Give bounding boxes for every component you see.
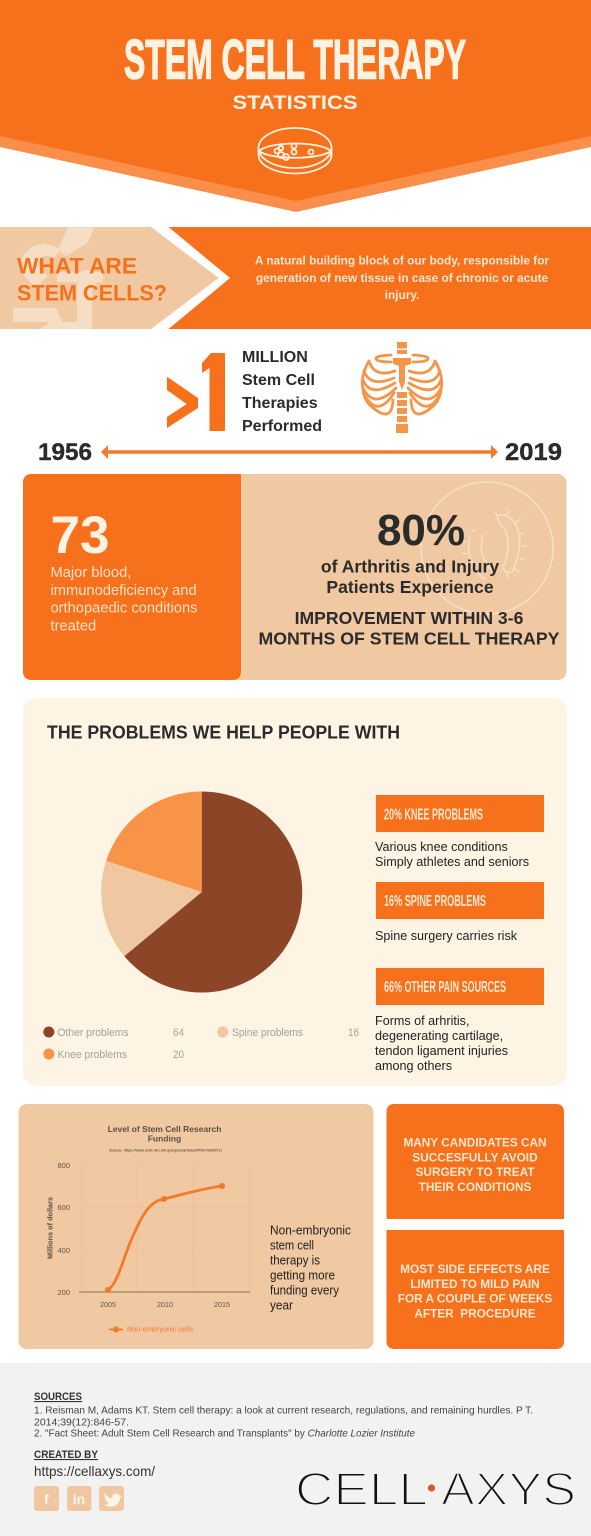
icon: microscope (13, 227, 103, 329)
line chart: 2005 (100, 1300, 116, 1309)
pie legend: Knee problems (58, 1049, 127, 1061)
callout: avoid surgery: SURGERY TO TREAT (416, 1165, 535, 1179)
conditions text: Major blood, (50, 565, 131, 581)
label: other pain sources: Forms of arhritis, (375, 1014, 469, 1028)
icon: facebook: f (44, 1491, 49, 1507)
line chart: Level of Stem Cell Research (108, 1124, 221, 1134)
created by heading: CREATED BY (34, 1449, 99, 1461)
label: other pain sources: degenerating cartilage, (375, 1029, 503, 1043)
pie legend: 16 (348, 1027, 359, 1039)
sources text: 2014;39(12):846-57. (34, 1418, 129, 1428)
heading: what are stem cells: WHAT ARE (17, 254, 137, 278)
footer (0, 1363, 591, 1536)
icon: linkedin: in (73, 1491, 85, 1507)
subtitle: STATISTICS (232, 93, 358, 114)
label: knee problems: Various knee conditions (375, 840, 508, 854)
funding caption: getting more (270, 1268, 335, 1282)
callout: side effects: LIMITED TO MILD PAIN (410, 1277, 540, 1291)
icon: ribcage (362, 342, 442, 433)
label: spine problems: 16% SPINE PROBLEMS (384, 893, 486, 910)
callout: side effects (386, 1230, 564, 1349)
conditions text: orthopaedic conditions (50, 600, 197, 616)
line chart: 800 (57, 1161, 70, 1170)
line chart: Millions of dollars (46, 1197, 54, 1259)
line chart: 2010 (157, 1300, 173, 1309)
callout: avoid surgery: SUCCESFULLY AVOID (412, 1150, 538, 1164)
panel: what are stem cells (0, 227, 591, 329)
arrow (108, 450, 491, 454)
stat: 73: 73 (50, 506, 109, 565)
sources heading: SOURCES (34, 1391, 82, 1403)
line chart: Funding (148, 1134, 181, 1144)
timeline (38, 439, 562, 466)
logo: cellaxys (295, 1463, 576, 1515)
panel: key statistics (23, 474, 566, 680)
website: https://cellaxys.com/ (34, 1463, 155, 1479)
definition text: A natural building block of our body, responsible for (255, 254, 549, 268)
funding caption: Non-embryonic (270, 1222, 351, 1238)
improvement text: IMPROVEMENT WITHIN 3-6 (295, 608, 524, 628)
heading: what are stem cells (17, 254, 167, 306)
heading: what are stem cells: STEM CELLS? (17, 280, 167, 306)
year 2019: 2019 (505, 439, 562, 466)
callout: avoid surgery (386, 1104, 564, 1219)
label: knee problems: 20% KNEE PROBLEMS (384, 806, 483, 824)
header banner (0, 0, 591, 212)
stat: 80%: 80% (377, 506, 465, 555)
label: knee problems (375, 795, 544, 869)
funding caption: funding every (270, 1282, 339, 1298)
label: spine problems: Spine surgery carries risk (375, 929, 518, 943)
sources text: 1. Reisman M, Adams KT. Stem cell therapy: a look at current research, regulations, and remaining hurdles. P T. (34, 1406, 533, 1416)
callout: side effects: FOR A COUPLE OF WEEKS (398, 1292, 552, 1306)
pie chart (101, 792, 302, 992)
callout: side effects: AFTER PROCEDURE (414, 1306, 536, 1320)
funding caption: year (270, 1298, 294, 1312)
year 1956: 1956 (38, 439, 92, 466)
icon: microbe circle (421, 482, 553, 614)
million text: Therapies (242, 395, 318, 412)
million text: Stem Cell (242, 372, 315, 389)
definition text: injury. (385, 288, 419, 302)
callout: avoid surgery: MANY CANDIDATES CAN (403, 1136, 547, 1150)
panel: problems we help with (23, 698, 567, 1086)
funding caption: therapy is (270, 1252, 320, 1268)
million text (242, 349, 322, 435)
pie legend (43, 1026, 359, 1061)
panel: research funding (18, 1104, 374, 1349)
line chart: Source: https://www.ncbi.nlm.nih.gov/pmc/articles/PMC4264671/ (109, 1148, 223, 1152)
callout: side effects: MOST SIDE EFFECTS ARE (400, 1262, 550, 1276)
logo: cellaxys: AXYS (441, 1463, 576, 1515)
improvement text: MONTHS OF STEM CELL THERAPY (258, 628, 560, 648)
improvement text (258, 556, 560, 648)
icon: facebook (34, 1486, 59, 1511)
callout: avoid surgery: THEIR CONDITIONS (419, 1180, 531, 1194)
improvement text: of Arthritis and Injury (321, 556, 499, 576)
label: other pain sources: tendon ligament injuries (375, 1044, 508, 1058)
line chart: Non-embryonic cells (127, 1324, 193, 1334)
funding caption: stem cell (270, 1238, 314, 1252)
definition text: generation of new tissue in case of chronic or acute (256, 271, 549, 285)
label: other pain sources (375, 968, 544, 1073)
label: knee problems: Simply athletes and seniors (375, 855, 529, 869)
line chart: 400 (57, 1246, 70, 1255)
funding caption (270, 1222, 351, 1312)
conditions text (50, 565, 197, 634)
sources text: 2. "Fact Sheet: Adult Stem Cell Research and Transplants" by Charlotte Lozier Institute (34, 1428, 415, 1440)
pie legend: 20 (173, 1049, 184, 1061)
big number 1 (202, 353, 225, 431)
conditions text: treated (50, 618, 96, 634)
label: spine problems (375, 882, 544, 943)
label: other pain sources: among others (375, 1059, 452, 1073)
line chart: 2015 (214, 1300, 230, 1309)
line chart: 600 (57, 1203, 70, 1212)
line chart (46, 1124, 250, 1334)
conditions text: immunodeficiency and (50, 583, 197, 599)
million text: MILLION (242, 349, 308, 366)
icon: petri dish (258, 128, 332, 174)
icon: linkedin (67, 1486, 92, 1511)
sources text (34, 1406, 533, 1440)
line chart: 200 (57, 1288, 70, 1297)
greater-than sign (167, 377, 198, 428)
orange stat card (23, 474, 241, 680)
logo: cellaxys: CELL (295, 1463, 428, 1515)
improvement text: Patients Experience (326, 577, 494, 597)
pie legend: Spine problems (232, 1027, 303, 1039)
heading: THE PROBLEMS WE HELP PEOPLE WITH (47, 722, 400, 742)
icon: twitter (99, 1486, 124, 1511)
million text: Performed (242, 418, 322, 435)
pie legend: Other problems (58, 1027, 129, 1039)
pie legend: 64 (173, 1027, 184, 1039)
definition text (255, 254, 549, 302)
stat: more than 1 million (167, 349, 322, 435)
